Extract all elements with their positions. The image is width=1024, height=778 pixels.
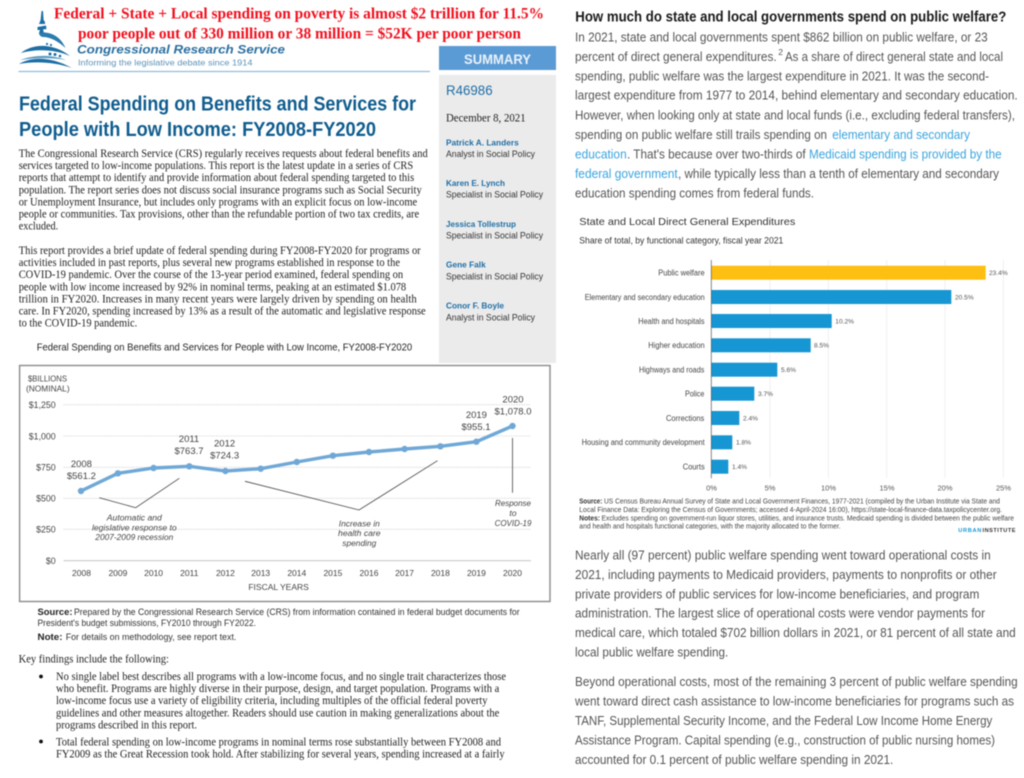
category labels: Corrections (666, 414, 704, 423)
annotation: health care spending: spending (342, 538, 377, 548)
text block: public welfare intro: As a share of direct general state and local (785, 50, 1003, 64)
value labels: 5.6% (781, 367, 796, 374)
text block: chart source and note: Note: (38, 632, 62, 643)
annotation: recession response: legislative response to (92, 522, 177, 532)
value labels: $724.3 (210, 451, 239, 462)
percent axis labels: 15% (879, 484, 895, 493)
text block: capital spending paragraph (574, 675, 1018, 767)
text block: report introduction (19, 148, 428, 233)
value labels: 3.7% (758, 391, 773, 398)
list: key findings bullets: programs described in this report. (56, 719, 197, 731)
axis title: (NOMINAL) (26, 383, 70, 393)
chart heading: state and local expenditures: Share of total, by functional category, fiscal year 2021 (579, 236, 783, 246)
list: key findings bullets: No single label best describes all programs with a low-income focus, and no single trait characterizes those (56, 671, 506, 683)
authors list: Jessica Tollestrup (446, 219, 516, 229)
value labels: $763.7 (174, 446, 204, 457)
category labels: Courts (683, 462, 705, 472)
list: key findings bullets: who benefit. Programs are highly diverse in their purpose, design, and target population. Programs with a (56, 683, 499, 695)
text block: operational costs paragraph (575, 548, 1016, 660)
category labels: Public welfare (658, 268, 705, 278)
text block: report update paragraph: to the COVID-19 pandemic. (19, 318, 137, 330)
annotation: COVID-19 response: Response (495, 498, 531, 508)
heading: line chart caption: Federal Spending on Benefits and Services for People with Low Income, FY2008-FY2020 (37, 342, 412, 354)
spending line (78, 423, 516, 494)
authors list (446, 137, 544, 322)
list: key findings bullets: Total federal spending on low-income programs in nominal terms rose substantially between FY2008 and (56, 736, 501, 748)
axis title: $BILLIONS (28, 374, 67, 384)
logo: Urban Institute wordmark: INSTITUTE (982, 528, 1016, 534)
value labels (67, 395, 531, 482)
title: report title: Federal Spending on Benefits and Services for (19, 92, 416, 116)
bars (711, 266, 986, 474)
value labels (732, 270, 1008, 471)
list: key findings bullets: guidelines and other measures altogether. Readers should use caution in making generalizations about the (56, 707, 499, 719)
logo: Urban Institute wordmark (958, 528, 1016, 534)
authors list: Analyst in Social Policy (446, 149, 536, 159)
chart: federal spending line chart (20, 366, 550, 602)
percent axis labels: 0% (706, 484, 717, 493)
text block: chart source and note (38, 607, 520, 643)
y-axis labels: $250 (36, 525, 56, 535)
annotation: recession response: Automatic and (106, 513, 162, 523)
annotation: COVID-19 response: to (509, 508, 517, 518)
text block: public welfare intro (575, 31, 1018, 200)
percent axis labels: 25% (996, 484, 1011, 493)
text block: chart source and note: Prepared by the Congressional Research Service (CRS) from information contained in federal budget documents for (74, 607, 520, 618)
value labels: 2.4% (743, 415, 758, 422)
x-axis labels: 2015 (323, 568, 343, 578)
text block: operational costs paragraph: 2021, including payments to Medicaid providers, payments to nonprofits or other (575, 568, 997, 582)
x-axis labels: 2013 (251, 568, 270, 578)
list: key findings bullets (39, 671, 506, 760)
icon: Congressional Research Service capitol dome logo (19, 11, 72, 68)
x-axis labels (72, 568, 522, 592)
category labels: Health and hospitals (638, 317, 705, 326)
value labels: 23.4% (989, 270, 1008, 277)
y-axis labels: $0 (46, 556, 56, 566)
x-axis labels: 2011 (180, 568, 199, 578)
authors list: Gene Falk (446, 260, 486, 270)
list: key findings bullets: low-income focus use a variety of eligibility criteria, including multiples of the official federal poverty (56, 695, 488, 707)
percent axis labels: 20% (937, 484, 953, 493)
authors list: Analyst in Social Policy (446, 312, 536, 322)
annotation: health care spending: Increase in (339, 518, 380, 528)
text block: report introduction: excluded. (19, 221, 58, 233)
text block: bar chart source and notes: US Census Bureau Annual Survey of State and Local Government Finances, 1977-2021 (compiled by the Urban Institute via State and (604, 497, 1000, 506)
logo text: Congressional Research Service: Informing the legislative debate since 1914 (78, 58, 253, 67)
chart heading: state and local expenditures: State and Local Direct General Expenditures (579, 216, 795, 228)
text block: report update paragraph: trillion in FY2020. Increases in many recent years were largely driven by spending on health (19, 293, 417, 305)
text block: bar chart source and notes: and health and hospitals functional categories, with the majority allocated to the former. (579, 521, 841, 530)
authors list: Specialist in Social Policy (446, 190, 544, 200)
authors list: Conor F. Boyle (446, 300, 504, 310)
text block: capital spending paragraph: TANF, Supplemental Security Income, and the Federal Low Income Home Energy (575, 714, 993, 728)
annotation: recession response (92, 478, 179, 542)
logo text: Congressional Research Service (18, 44, 430, 72)
value labels: $561.2 (67, 471, 96, 482)
x-axis labels: 2017 (395, 568, 414, 578)
value labels: 20.5% (955, 294, 974, 301)
callout: red headline on poverty spending (54, 6, 544, 42)
category labels: Elementary and secondary education (585, 293, 705, 302)
y-axis labels: $750 (36, 463, 56, 473)
text block: report update paragraph: activities included in past reports, plus several new programs established in response to the (19, 257, 400, 269)
title: report title (19, 92, 416, 141)
value labels: 1.8% (736, 440, 751, 447)
text block: report introduction: services targeted to low-income populations. This report is the latest update in a series of CRS (19, 160, 413, 172)
annotation: health care spending: health care (338, 528, 381, 538)
percent axis labels: 10% (821, 484, 836, 493)
x-axis labels: 2012 (216, 568, 235, 578)
x-axis labels: 2019 (467, 568, 486, 578)
category labels: Higher education (648, 341, 705, 350)
text block: bar chart source and notes (579, 497, 1014, 530)
callout: red headline on poverty spending: Federal + State + Local spending on poverty is almost $2 trillion for 11.5% (54, 6, 544, 22)
text block: public welfare intro: percent of direct general expenditures. (575, 50, 777, 64)
text block: public welfare intro: education spending comes from federal funds. (575, 186, 814, 200)
x-axis labels: 2009 (108, 568, 128, 578)
category labels: Police (685, 390, 705, 398)
text block: report update paragraph: care. In FY2020, spending increased by 13% as a result of the automatic and legislative response (19, 306, 426, 318)
x-axis labels: 2018 (431, 568, 450, 578)
text block: capital spending paragraph: accounted for 0.1 percent of public welfare spending in 2021. (575, 753, 893, 767)
x-axis labels: 2008 (72, 568, 91, 578)
text block: public welfare intro: spending, public welfare was the largest expenditure in 2021. It was the second- (575, 69, 989, 83)
panel: summary header: SUMMARY (464, 51, 532, 67)
text block: operational costs paragraph: administration. The largest slice of operational costs were vendor payments for (575, 607, 986, 621)
panel: summary header (439, 46, 556, 70)
text block: public welfare intro: elementary and secondary (832, 128, 971, 142)
x-axis labels: 2010 (144, 568, 163, 578)
value labels: 2011 (179, 434, 199, 445)
axis title (26, 374, 70, 393)
text block: report introduction: population. The report series does not discuss social insurance programs such as Social Security (19, 184, 422, 196)
text block: public welfare intro: In 2021, state and local governments spent $862 billion on public welfare, or 23 (575, 31, 988, 45)
text block: bar chart source and notes: Source: (579, 497, 602, 506)
text block: report update paragraph: COVID-19 pandemic. Over the course of the 13-year period examined, federal spending on (19, 269, 404, 281)
panel: report details and authors (439, 75, 556, 363)
y-axis labels: $500 (36, 494, 56, 504)
value labels: 2020 (502, 395, 524, 406)
value labels: $955.1 (461, 422, 491, 433)
text block: report update paragraph: people with low income increased by 92% in nominal terms, peaking at an estimated $1.078 (19, 281, 407, 293)
text block: report introduction: reports that attempt to identify and provide information about federal spending targeted to this (19, 172, 414, 184)
text block: operational costs paragraph: Nearly all (97 percent) public welfare spending went toward operational costs in (575, 548, 991, 562)
y-axis labels: $1,250 (29, 400, 56, 410)
category labels: Housing and community development (582, 438, 705, 447)
percent axis labels (706, 484, 1011, 493)
text block: key findings intro: Key findings include the following: (19, 653, 169, 665)
callout: red headline on poverty spending: poor people out of 330 million or 38 million = $52K per poor person (78, 25, 521, 42)
text block: chart source and note: For details on methodology, see report text. (66, 632, 236, 643)
text block: chart source and note: President's budget submissions, FY2010 through FY2022. (38, 618, 256, 629)
text block: report introduction: or Unemployment Insurance, but includes only programs with an explicit focus on low-income (19, 196, 417, 208)
value labels: 8.5% (814, 343, 829, 350)
authors list: Patrick A. Landers (446, 137, 519, 147)
y-axis labels (29, 400, 56, 566)
text block: capital spending paragraph: Assistance Program. Capital spending (e.g., construction of public nursing homes) (575, 733, 995, 747)
report number: R46986 (446, 82, 493, 98)
annotation: health care spending (245, 461, 438, 548)
category labels (582, 268, 705, 472)
x-axis labels: FISCAL YEARS (248, 582, 309, 592)
x-axis labels: 2020 (503, 568, 522, 578)
value labels: 2019 (466, 410, 487, 421)
text block: public welfare intro: . That's because over two-thirds of (627, 148, 806, 162)
category labels: Highways and roads (639, 366, 704, 374)
annotation: COVID-19 response: COVID-19 (495, 518, 532, 528)
text block: public welfare intro: Medicaid spending is provided by the (809, 148, 1002, 162)
value labels: 1.4% (732, 464, 747, 471)
authors list: Specialist in Social Policy (446, 231, 544, 241)
chart heading: state and local expenditures (579, 216, 795, 246)
x-axis labels: 2014 (287, 568, 307, 578)
logo text: Congressional Research Service: Congressional Research Service (77, 44, 286, 56)
text block: bar chart source and notes: Notes: (579, 513, 600, 522)
text block: public welfare intro: federal government (575, 167, 678, 181)
annotation: recession response: 2007-2009 recession (94, 532, 174, 542)
report date: December 8, 2021 (446, 113, 526, 125)
text block: public welfare intro: education (575, 148, 627, 162)
y-axis labels: $1,000 (29, 431, 56, 441)
annotation: COVID-19 response (495, 438, 532, 528)
text block: public welfare intro: 2 (778, 47, 783, 57)
text block: report update paragraph (19, 245, 426, 330)
authors list: Specialist in Social Policy (446, 271, 544, 281)
text block: report introduction: people or communities. Tax provisions, other than the refundable portion of two tax credits, are (19, 208, 419, 220)
percent axis labels: 5% (765, 484, 776, 493)
x-axis labels: 2016 (360, 568, 379, 578)
text block: report update paragraph: This report provides a brief update of federal spending during FY2008-FY2020 for programs or (19, 245, 421, 257)
text block: operational costs paragraph: private providers of public services for low-income beneficiaries, and program (575, 587, 979, 601)
chart: expenditure share bar chart (582, 260, 1011, 493)
text block: operational costs paragraph: local public welfare spending. (575, 646, 728, 660)
list: key findings bullets: FY2009 as the Great Recession took hold. After stabilizing for several years, spending increased at a fairly (56, 748, 505, 760)
text block: report introduction: The Congressional Research Service (CRS) regularly receives requests about federal benefits and (19, 148, 428, 160)
value labels: 2012 (214, 439, 235, 450)
logo: Urban Institute wordmark: URBAN (958, 528, 981, 534)
value labels: $1,078.0 (495, 407, 531, 418)
value labels: 10.2% (835, 318, 854, 325)
text block: bar chart source and notes: Local Finance Data: Exploring the Census of Governments; accessed 4-April-2024 16:00), https://state-local-finance-data.taxpolicycenter.org. (579, 505, 1002, 514)
text block: chart source and note: Source: (38, 607, 72, 618)
text block: public welfare intro: , while typically less than a tenth of elementary and secondary (678, 167, 1000, 181)
text block: public welfare intro: spending on public welfare still trails spending on (575, 128, 827, 142)
authors list: Karen E. Lynch (446, 178, 505, 188)
value labels: 2008 (71, 459, 92, 470)
title: report title: People with Low Income: FY2008-FY2020 (19, 118, 376, 141)
